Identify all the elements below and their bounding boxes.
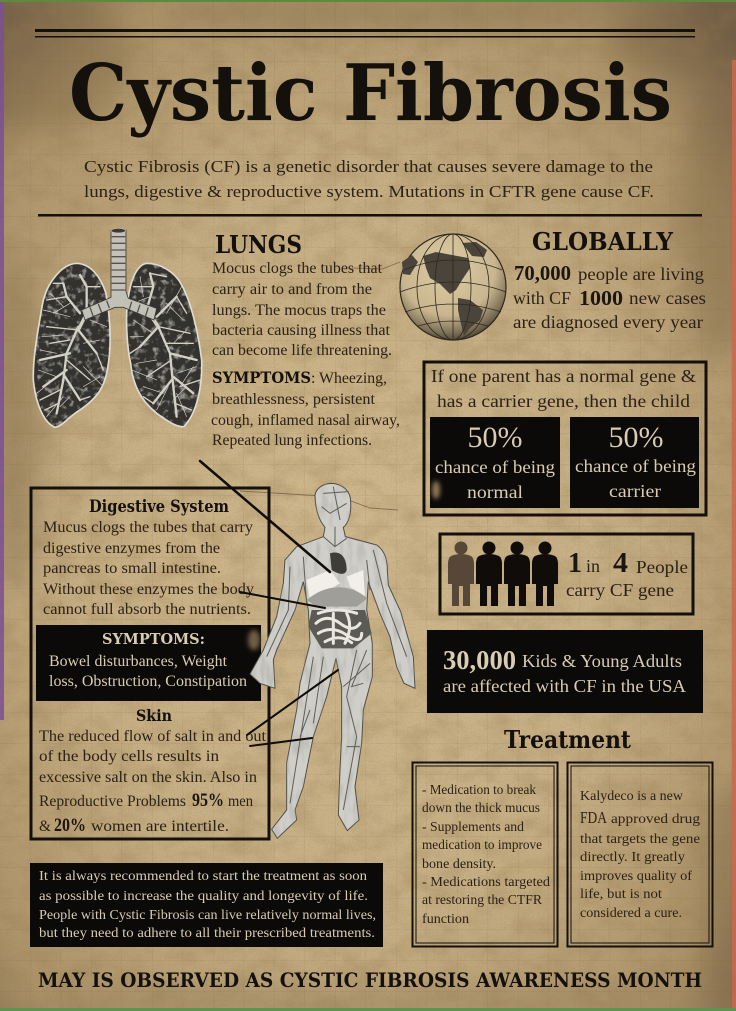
callout: digestive symptoms: loss, Obstruction, Constipation: [49, 673, 247, 690]
panel: 30,000 kids: are affected with CF in the USA: [443, 676, 686, 696]
text: 1 in 4 people carry CF gene: carry CF gene: [566, 580, 674, 600]
panel: treatment list: - Medication to break: [422, 783, 536, 798]
text: lungs symptoms: SYMPTOMS: [212, 368, 311, 387]
text: skin description: men: [228, 793, 253, 810]
panel: globally: [513, 227, 706, 332]
panel: treatment list: down the thick mucus: [422, 801, 540, 816]
callout: 50% carrier: 50%: [608, 421, 664, 454]
callout: treatment advice: [30, 863, 383, 947]
panel: treatment list: at restoring the CTFR: [422, 893, 543, 908]
heading: treatment: Treatment: [504, 725, 631, 754]
callout: 50% normal: chance of being: [435, 457, 555, 477]
text: lungs symptoms: breathlessness, persistent: [212, 391, 376, 408]
arrows: body pointer lines: [200, 461, 338, 746]
callout: treatment advice: People with Cystic Fibrosis can live relatively normal lives,: [39, 908, 376, 923]
text: skin description: of the body cells results in: [39, 748, 219, 765]
text: inheritance intro: [431, 366, 696, 411]
callout: 50% carrier: [570, 417, 699, 508]
icon: lungs: [30, 228, 205, 430]
panel: Kalydeco: considered a cure.: [580, 906, 682, 921]
heading: skin: Skin: [136, 706, 172, 725]
panel: Kalydeco: life, but is not: [580, 887, 662, 902]
callout: 50% carrier: carrier: [609, 481, 661, 501]
panel: Kalydeco: Kalydeco is a new: [580, 789, 684, 804]
text: skin description: 20%: [54, 815, 86, 836]
text: global statistics: 70,000: [514, 261, 571, 285]
text: digestive description: cannot full absorb the nutrients.: [43, 601, 251, 618]
text: skin description: 95%: [192, 790, 224, 811]
text: global statistics: people are living: [578, 264, 704, 284]
text: 1 in 4 people carry CF gene: 1: [568, 547, 582, 579]
text: skin description: [39, 728, 267, 836]
callout: 50% carrier: chance of being: [575, 456, 696, 476]
intro text: lungs, digestive & reproductive system. Mutations in CFTR gene cause CF.: [84, 182, 654, 201]
text: global statistics: 1000: [579, 286, 623, 310]
text: 1 in 4 people carry CF gene: People: [636, 557, 688, 577]
panel: treatment list: medication to improve: [422, 838, 542, 853]
panel: parent gene inheritance: [424, 362, 706, 515]
title: Cystic Fibrosis: [69, 48, 672, 139]
text: 1 in 4 people carry CF gene: [566, 547, 688, 600]
text: lungs description: can become life threatening.: [212, 342, 392, 359]
heading: digestive system: Digestive System: [89, 497, 229, 517]
callout: digestive symptoms: SYMPTOMS:: [102, 630, 205, 648]
icon: four people: [448, 542, 558, 606]
panel: treatment list: [412, 762, 558, 946]
text: digestive description: Without these enzymes the body: [43, 581, 254, 598]
intro text: Cystic Fibrosis (CF) is a genetic disorder that causes severe damage to the: [84, 157, 653, 176]
panel: treatment list: - Supplements and: [422, 820, 524, 835]
text: skin description: women are intertile.: [91, 818, 229, 835]
heading: globally: GLOBALLY: [532, 227, 674, 256]
text: lungs symptoms: cough, inflamed nasal airway,: [211, 412, 400, 429]
panel: 30,000 kids: [427, 630, 703, 713]
panel: Kalydeco: directly. It greatly: [580, 850, 685, 865]
callout: 50% normal: [430, 417, 560, 508]
text: inheritance intro: If one parent has a normal gene &: [431, 366, 696, 386]
callout: 50% normal: normal: [467, 482, 523, 502]
text: inheritance intro: has a carrier gene, then the child: [437, 391, 690, 411]
footer banner: MAY IS OBSERVED AS CYSTIC FIBROSIS AWARENESS MONTH: [38, 969, 702, 992]
panel: 1 in 4 carriers: [440, 534, 693, 614]
panel: Kalydeco: [568, 762, 712, 946]
heading: lungs: LUNGS: [215, 230, 302, 259]
text: skin description: excessive salt on the skin. Also in: [39, 769, 257, 786]
callout: treatment advice: as possible to increase the quality and longevity of life.: [39, 889, 368, 904]
text: skin description: Reproductive Problems: [39, 793, 186, 810]
text: skin description: The reduced flow of salt in and out: [39, 728, 267, 745]
panel: 30,000 kids: Kids & Young Adults: [522, 651, 682, 671]
callout: digestive symptoms: Bowel disturbances, Weight: [49, 653, 228, 670]
text: digestive description: Mucus clogs the tubes that carry: [43, 519, 253, 536]
panel: treatment list: function: [422, 912, 469, 927]
panel: Kalydeco: improves quality of: [580, 869, 692, 884]
text: skin description: &: [39, 818, 52, 835]
panel: Kalydeco: approved drug: [611, 812, 700, 827]
text: global statistics: with CF: [513, 288, 571, 308]
intro text: [38, 157, 702, 216]
panel: treatment list: bone density.: [422, 857, 496, 872]
text: 1 in 4 people carry CF gene: 4: [613, 547, 628, 579]
callout: digestive symptoms: [36, 625, 261, 701]
callout: treatment advice: It is always recommended to start the treatment as soon: [39, 869, 367, 884]
text: global statistics: new cases: [629, 288, 706, 308]
icon: anatomical human body: [247, 480, 420, 843]
callout: treatment advice: but they need to adhere to all their prescribed treatments.: [39, 926, 375, 941]
text: global statistics: are diagnosed every year: [513, 312, 703, 332]
text: 1 in 4 people carry CF gene: in: [586, 556, 600, 576]
text: lungs description: Mocus clogs the tubes that: [212, 260, 383, 277]
text: lungs symptoms: [211, 368, 400, 449]
panel: lungs text: [211, 230, 400, 449]
panel: treatment list: - Medications targeted: [422, 875, 550, 890]
text: lungs description: carry air to and from the: [212, 281, 372, 298]
text: lungs symptoms: : Wheezing,: [311, 370, 387, 387]
text: lungs description: lungs. The mocus traps the: [212, 302, 386, 319]
text: global statistics: [513, 261, 706, 332]
callout: 50% normal: 50%: [468, 421, 522, 454]
icon: globe: [400, 234, 506, 340]
panel: digestive system and skin: [31, 488, 269, 839]
panel: Kalydeco: FDA: [580, 808, 608, 827]
text: digestive description: digestive enzymes from the: [43, 540, 220, 557]
panel: Kalydeco: that targets the gene: [580, 832, 700, 847]
text: lungs description: bacteria causing illness that: [212, 322, 391, 339]
text: lungs description: [212, 260, 392, 359]
text: digestive description: [43, 519, 254, 618]
text: lungs symptoms: Repeated lung infections.: [212, 432, 372, 449]
panel: 30,000 kids: 30,000: [443, 645, 516, 675]
text: digestive description: pancreas to small intestine.: [43, 560, 221, 577]
